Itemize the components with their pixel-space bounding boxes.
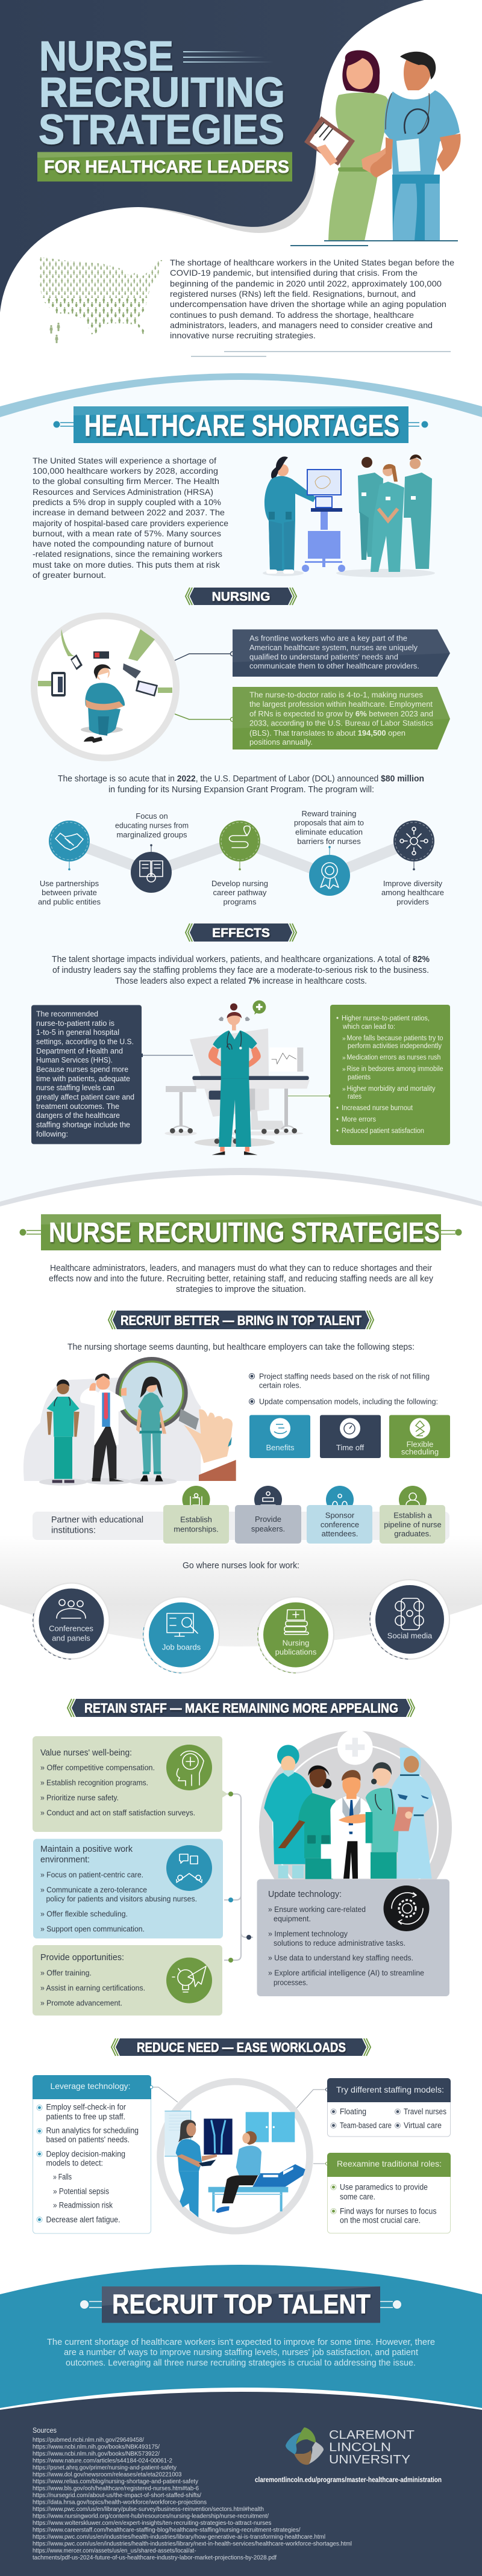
logo: Claremont Lincoln University: UNIVERSITY [329,2453,410,2466]
icon: diversity [393,821,434,871]
card: mentorships: Establish [180,1515,212,1524]
intro text: registered nurses (RNs) left the field. Resignations, burnout, and [170,289,416,299]
panel: healthcare shortages background [0,373,482,1264]
intro text: innovative nurse recruiting strategies. [170,331,316,340]
badge: conferences and panels [33,1583,110,1659]
panel: provide opportunities: » Offer training. [40,1969,92,1977]
badge: job boards: Job boards [162,1642,201,1652]
callout: frontline workers: qualified to understand patients' needs and [249,653,398,661]
panel: recommended ratio: nurse-to-patient ratio is [36,1019,114,1028]
panel: leverage technology: based on patients' needs. [46,2135,130,2144]
panel: dangers list: » [342,1035,346,1042]
illustration: stressed nurse with bed [164,1001,310,1155]
heading: recruit top talent: RECRUIT TOP TALENT [112,2289,371,2320]
labels: program goals: Focus on [136,812,168,821]
panel: maintain positive environment: Maintain a positive work [40,1845,133,1854]
illustration: burned out nurse in circle [34,616,176,758]
labels: program goals: among healthcare [381,888,444,897]
card: benefits [249,1415,310,1458]
icon: bulb and paper plane [166,1958,212,2003]
panel: update technology: » Implement technology [268,1929,348,1938]
icon: Alaska and Hawaii people [49,323,60,343]
panel: staffing models: Floating [340,2107,366,2116]
text: shortage overview: predicts a 5% drop in supply coupled with a 10% [33,497,221,507]
text: DOL funding [58,774,424,795]
panel: leverage technology: models to detect: [46,2159,103,2167]
panel: staffing models: Try different staffing models: [336,2085,444,2094]
text: shortage overview: majority of hospital-based care providers experience [33,518,228,528]
text: sources: https://www.ncbi.nlm.nih.gov/books/NBK493175/ [33,2443,160,2450]
card: conference attendees: attendees. [322,1529,358,1538]
card: pipeline: pipeline of nurse [384,1520,442,1529]
callout: frontline workers [233,630,450,677]
panel: gray transition background [0,1535,482,1646]
card: conference attendees: conference [321,1520,359,1529]
panel: provide opportunities [33,1945,222,2016]
badge: conferences and panels: Conferences [49,1624,93,1633]
icon: community chat [166,1845,212,1891]
panel: dangers list: rates [348,1093,362,1100]
badge: nursing publications: Nursing [283,1639,309,1647]
text: conclusion: outcomes. Leveraging all three nurse recruiting strategies is crucial to addressing the issue. [66,2357,416,2368]
intro text [170,258,454,340]
text: effects intro: of industry leaders say the staffing problems they face are a moderate-to-serious risk to the business. [52,966,429,975]
card: time off: Time off [336,1443,364,1452]
panel: dangers list: patients [348,1074,371,1081]
panel: recommended ratio: time with patients, adequate [36,1074,130,1083]
card: pipeline: graduates. [394,1529,431,1538]
icon: head with cross [166,1745,212,1790]
card: speakers [235,1486,301,1544]
panel: dangers list: Increased nurse burnout [342,1105,413,1112]
illustration: medical staff group [259,1731,452,1879]
title: RECRUITING [39,69,285,116]
panel: update technology: » Explore artificial intelligence (AI) to streamline [268,1969,424,1977]
text: DOL funding: The shortage is so acute that in 2022, the U.S. Department of Labor (DOL) announced $80 million [58,774,424,784]
panel: leverage technology: » Falls [53,2172,72,2182]
text: shortage overview: 100,000 healthcare workers by 2028, according [33,466,218,476]
icon: US map of people [39,257,163,335]
text: strategies intro [49,1264,434,1294]
text: shortage overview: The United States will experience a shortage of [33,456,216,465]
panel: leverage technology: Deploy decision-making [46,2149,125,2159]
card: pipeline [380,1486,445,1544]
text: shortage overview: must take on more duties. This puts them at risk [33,560,221,570]
panel: leverage technology: Decrease alert fatigue. [46,2215,120,2224]
card: benefits: Benefits [266,1443,295,1452]
panel: recommended ratio: settings, according to the U.S. [36,1037,134,1046]
card: conference attendees: Sponsor [325,1511,355,1519]
panel: dangers list: • [336,1105,339,1112]
text: shortage overview: Resources and Services Administration (HRSA) [33,487,213,497]
panel: partner with educational institutions: institutions: [51,1525,96,1535]
card: time off [320,1415,381,1458]
panel: reexamine traditional roles: on the most crucial care. [340,2215,421,2225]
panel: recommended ratio: Human Services (HHS). [36,1055,113,1064]
title [39,33,285,153]
ribbon: reduce need: REDUCE NEED — EASE WORKLOADS [137,2040,346,2055]
panel: recommended ratio: The recommended [36,1009,98,1019]
text: sources: https://www.careerstaff.com/healthcare-staffing-blog/healthcare-staffing/nursing-recruitment-strategies/ [33,2526,301,2533]
card: flexible scheduling [389,1415,450,1458]
labels: program goals: eliminate education [295,827,363,837]
panel: leverage technology: patients to free up staff. [46,2112,125,2121]
text: shortage overview: of greater burnout. [33,570,106,580]
panel: dangers list: perform activities independently [348,1043,442,1050]
ribbon: retain staff: RETAIN STAFF — MAKE REMAINING MORE APPEALING [84,1701,398,1716]
intro text: COVID-19 pandemic, but intensified during that crisis. From the [170,268,418,278]
panel: dangers list: which can lead to: [342,1023,395,1031]
panel: staffing models: Team-based care [340,2121,392,2130]
intro text: The shortage of healthcare workers in the United States began before the [170,258,454,267]
labels: program goals: career pathway [213,888,267,897]
text: shortage overview [33,456,228,580]
ribbon: effects: EFFECTS [212,926,270,940]
ground lines [290,240,458,246]
panel: update technology: » Ensure working care-related [268,1905,366,1914]
text: sources: https://www.wolterskluwer.com/en/expert-insights/ten-recruiting-strategies-to-attract-nurses [33,2519,271,2527]
panel: dangers list: More errors [342,1116,376,1123]
labels: program goals: providers [396,897,429,907]
panel: recommended ratio: treatment outcomes. The [36,1102,119,1111]
ribbon: effects [186,923,296,942]
panel: staffing models [327,2078,451,2137]
text: conclusion: The current shortage of healthcare workers isn't expected to improve for some time. However, there [47,2337,435,2347]
labels: program goals: barriers for nurses [297,837,361,846]
text: shortage overview: to the global consulting firm Mercer. The Health [33,476,219,486]
ribbon: nursing: NURSING [212,590,270,604]
badge: conferences and panels: and panels [52,1634,90,1642]
panel: leverage technology: » Readmission risk [53,2201,113,2209]
panel: maintain positive environment: environment: [40,1855,90,1865]
text: sources: https://www.mercer.com/assets/us/en_us/shared-assets/local/at- [33,2547,196,2554]
panel: reexamine traditional roles: Find ways for nurses to focus [340,2207,437,2215]
panel: dangers list: Medication errors as nurses rush [347,1054,441,1061]
panel: dangers list: Higher nurse-to-patient ratios, [342,1015,430,1022]
logo: Claremont Lincoln University: CLAREMONT [329,2429,415,2442]
panel: recommended ratio: Department of Health and [36,1046,123,1055]
panel: dangers list: » [342,1086,346,1093]
panel: value nurses well-being: » Prioritize nurse safety. [40,1793,119,1802]
panel: dangers list: More falls because patients try to [347,1035,443,1042]
text: program url: claremontlincoln.edu/programs/master-healthcare-administration [255,2477,442,2484]
panel: partner with educational institutions [33,1486,449,1544]
connector: retain panels to technology [222,1790,253,1963]
connectors: effects panels to nurse [142,1054,331,1097]
icon: book [131,844,172,893]
panel: reexamine traditional roles: Reexamine traditional roles: [337,2159,442,2168]
card: conference attendees [307,1486,372,1544]
icon: award ribbon [309,846,350,896]
panel: leverage technology: Leverage technology: [51,2081,130,2091]
panel: maintain positive environment: » Support open communication. [40,1924,145,1934]
panel: recommended ratio: 1-to-5 in general hospital [36,1028,119,1037]
text: go where nurses look: Go where nurses look for work: [183,1561,299,1571]
panel: update technology [257,1879,449,1996]
icon: gear update [383,1885,429,1931]
panel: recommended ratio: greatly affect patient care and [36,1092,134,1102]
subtitle banner: FOR HEALTHCARE LEADERS [44,157,289,177]
text: sources: tachments/pdf-us-2024-future-of-us-healthcare-industry-labor-market-projections-by-2028.pdf [33,2554,277,2561]
panel: dangers list: • [336,1015,339,1022]
callout: nurse to doctor ratio [233,687,450,750]
labels: program goals: Reward training [301,809,357,818]
text: sources: https://www.bls.gov/ooh/healthcare/registered-nurses.htm#tab-6 [33,2485,199,2492]
text: sources: https://psnet.ahrq.gov/primer/nursing-and-patient-safety [33,2464,177,2471]
panel: leverage technology [33,2075,151,2233]
text: effects intro: The talent shortage impacts individual workers, patients, and healthcare organizations. A total of 82% [52,955,430,964]
text: effects intro: Those leaders also expect a related 7% increase in healthcare costs. [115,976,367,986]
panel: reexamine traditional roles: some care. [340,2193,375,2201]
panel: update technology: Update technology: [268,1890,342,1899]
text: sources: https://data.hrsa.gov/topics/health-workforce/workforce-projections [33,2498,207,2506]
panel: staffing models: Virtual care [404,2121,442,2130]
logo: Claremont Lincoln University: LINCOLN [329,2441,391,2454]
intro text: continues to push demand. To address the shortage, healthcare [170,310,414,320]
text: sources: https://www.pwc.com/us/en/industries/health-industries/library/how-generative-ai-is-transforming-healthcare.html [33,2533,325,2540]
list: staffing steps: certain roles. [259,1381,301,1389]
panel: recommended ratio: dangers of the healthcare [36,1111,120,1120]
panel: reexamine traditional roles [327,2153,451,2233]
list: staffing steps [249,1371,438,1406]
panel: update technology: » Use data to understand key staffing needs. [268,1953,413,1963]
panel: recommended ratio [31,1005,142,1144]
labels: program goals: Use partnerships [40,879,99,888]
intro text: administrators, leaders, and managers need to consider creative and [170,320,433,330]
labels: program goals: between private [42,888,97,897]
text: shortage overview: have noted the compounding nature of burnout [33,539,213,548]
title: STRATEGIES [39,106,284,153]
panel: recommended ratio: staffing shortage include the [36,1120,130,1129]
badge: job boards [143,1597,219,1673]
callout: nurse to doctor ratio: positions annually. [249,737,313,746]
panel: value nurses well-being: » Offer competitive compensation. [40,1763,155,1772]
text: sources: https://nursegrid.com/about-us/the-impact-of-short-staffed-shifts/ [33,2492,201,2499]
panel: value nurses well-being: » Conduct and act on staff satisfaction surveys. [40,1808,195,1817]
panel: update technology: equipment. [274,1914,311,1923]
panel: update technology: solutions to reduce administrative tasks. [274,1938,405,1948]
badge: social media [370,1580,449,1659]
text: conclusion: are a number of ways to improve nursing staffing levels, nurses' job satisfaction, and patient [64,2347,419,2357]
text: sources: Sources [33,2426,57,2435]
labels: program goals: Develop nursing [211,879,268,888]
card: speakers: Provide [255,1515,281,1524]
chart: program zigzag [49,821,434,896]
panel: value nurses well-being: Value nurses' well-being: [40,1748,132,1758]
badge: nursing publications: publications [275,1647,317,1657]
labels: program goals: Improve diversity [383,879,443,888]
heading: healthcare shortages: HEALTHCARE SHORTAGES [84,409,399,442]
callout: nurse to doctor ratio: The nurse-to-doctor ratio is 4-to-1, making nurses [249,690,423,700]
labels: program goals: programs [224,897,257,907]
panel: maintain positive environment: » Focus on patient-centric care. [40,1870,143,1879]
connectors: reduce need panels to circle [149,2085,329,2165]
panel: dangers list: Rise in bedsores among immobile [347,1066,443,1073]
panel: partner with educational institutions: Partner with educational [51,1515,143,1525]
text: sources: https://www.ncbi.nlm.nih.gov/books/NBK573922/ [33,2450,160,2457]
panel: maintain positive environment: » Communicate a zero-tolerance [40,1885,147,1894]
callout: nurse to doctor ratio: the largest profession within healthcare. Employment [249,700,433,709]
panel: staffing models: Travel nurses [404,2107,446,2116]
panel: value nurses well-being: » Establish recognition programs. [40,1778,148,1787]
text: strategies intro: strategies to improve the situation. [176,1285,306,1294]
panel: provide opportunities: » Promote advancement. [40,1999,122,2007]
labels: program goals: educating nurses from [115,821,189,830]
badge: social media: Social media [387,1631,433,1640]
labels: program goals: marginalized groups [116,830,187,839]
panel: leverage technology: Employ self-check-in for [46,2102,126,2112]
text: shortage overview: -related resignations, since the remaining workers [33,549,222,559]
card: flexible scheduling: scheduling [401,1447,439,1456]
ribbon: nursing [186,588,296,605]
text: daunting: The nursing shortage seems daunting, but healthcare employers can take the following steps: [67,1342,415,1352]
callout: nurse to doctor ratio: 2033, according to the U.S. Bureau of Labor Statistics [249,719,433,727]
illustration: nurse at monitor and three nurses [263,455,435,577]
text: sources: https://www.relias.com/blog/nursing-shortage-and-patient-safety [33,2478,199,2485]
panel: provide opportunities: » Assist in earning certifications. [40,1983,145,1993]
title: NURSE [39,33,174,79]
card: flexible scheduling: Flexible [407,1440,433,1448]
callout: frontline workers: As frontline workers who are a key part of the [249,633,407,643]
intro text: beginning of the pandemic in 2020 until 2022, approximately 100,000 [170,279,442,288]
panel: dangers list: » [342,1066,346,1073]
subtitle banner [37,152,292,182]
text: shortage overview: burnout, with a mean rate of 57%. Many sources [33,529,221,538]
text: strategies intro: Healthcare administrators, leaders, and managers must do what they can to reduce shortages and their [50,1264,432,1273]
text: effects intro [52,955,430,986]
panel: dangers list: • [336,1128,339,1135]
labels: program goals: and public entities [38,897,101,907]
panel: update technology: processes. [274,1978,308,1987]
card: speakers: speakers. [251,1524,285,1533]
panel: maintain positive environment [33,1839,223,1938]
title speed lines [183,51,274,63]
icon: handshake [49,821,90,871]
ribbon: recruit better: RECRUIT BETTER — BRING IN TOP TALENT [120,1313,362,1328]
panel: dangers list: Higher morbidity and mortality [347,1085,436,1093]
text: shortage overview: increase in demand between 2022 and 2037. The [33,507,225,517]
text: sources: https://www.nature.com/articles/s44184-024-00061-2 [33,2457,172,2465]
card: mentorships [163,1486,229,1544]
icon: road and pin [219,821,260,871]
text: sources: https://pubmed.ncbi.nlm.nih.gov/29649458/ [33,2436,144,2444]
card: mentorships: mentorships. [174,1524,219,1534]
illustration: candidates under magnifier [23,1357,236,1486]
intro text: undercompensation have driven the shortage while an aging population [170,299,446,309]
panel: recommended ratio: following: [36,1129,68,1138]
background: hero dark shape [0,0,424,312]
callout: frontline workers: communicate them to other healthcare providers. [249,661,419,671]
panel: dangers list: • [336,1116,339,1123]
panel: recommended ratio: nurse staffing levels can [36,1083,114,1092]
callout: frontline workers: American healthcare system, nurses are uniquely [249,643,418,652]
panel: recommended ratio: Because nurses spend more [36,1064,128,1074]
text: strategies intro: effects now and into the future. Recruiting better, retaining staff, and reducing staffing needs are all key [49,1274,434,1283]
panel: maintain positive environment: policy for patients and visitors abusing nurses. [46,1894,197,1904]
panel: dangers list [330,1005,450,1145]
card: pipeline: Establish a [393,1511,433,1519]
icon: logo swirl [286,2427,324,2465]
list: staffing steps: Update compensation models, including the following: [259,1397,438,1406]
badge: nursing publications [258,1597,334,1673]
text: sources: https://www.nursingworld.org/content-hub/resources/nursing-leadership/nurse-recruitment/ [33,2513,269,2520]
text: sources: https://www.dol.gov/newsroom/releases/eta/eta20221003 [33,2471,182,2478]
illustration: clinician and patient [160,2082,310,2231]
connector: circle to dark callout [175,651,235,660]
logo: Claremont Lincoln University [286,2427,415,2466]
list: staffing steps: Project staffing needs based on the risk of not filling [259,1371,430,1381]
callout: nurse to doctor ratio: of RNs is expected to grow by 6% between 2023 and [249,709,433,718]
callout: nurse to doctor ratio: (BLS). That translates to about 194,500 open [249,728,405,737]
panel: dangers list: Reduced patient satisfaction [342,1128,424,1135]
panel: maintain positive environment: » Offer flexible scheduling. [40,1910,128,1918]
panel: leverage technology: » Potential sepsis [53,2186,109,2196]
panel: leverage technology: Run analytics for scheduling [46,2126,139,2135]
text: sources: https://www.pwc.com/us/en/library/pulse-survey/business-reinvention/sectors.html#health [33,2506,264,2513]
panel: value nurses well-being [33,1736,222,1832]
labels: program goals [38,809,444,907]
connector: circle to green callout [175,714,235,721]
panel: recruit top talent background [0,2265,482,2576]
panel: reexamine traditional roles: Use paramedics to provide [340,2183,428,2191]
illustration: two nurses [304,50,461,241]
panel: provide opportunities: Provide opportunities: [40,1953,124,1963]
text: conclusion [47,2337,435,2368]
text: sources [33,2426,352,2561]
labels: program goals: proposals that aim to [294,818,364,827]
panel: dangers list: » [342,1055,346,1061]
text: DOL funding: in funding for its Nursing Expansion Grant Program. The program will: [108,785,374,795]
text: sources: https://www.pwc.com/us/en/industries/health-industries/library/next-in-health-services/healthcare-workforce-shortages.html [33,2540,352,2548]
